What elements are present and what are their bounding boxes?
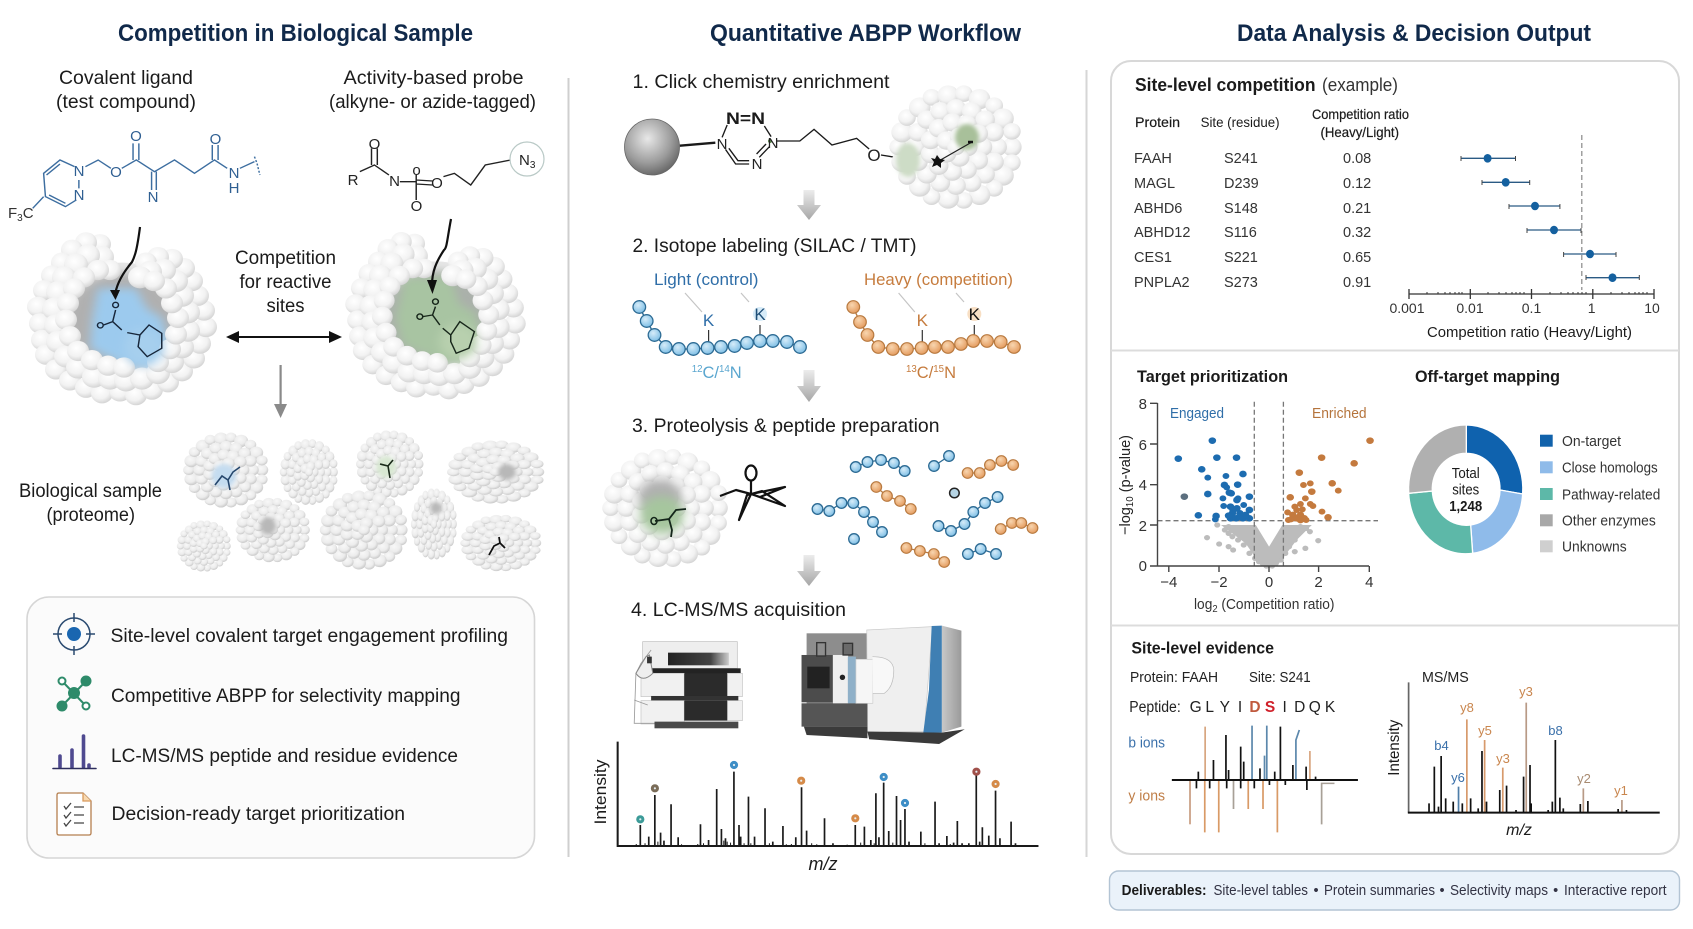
table rows: S148 bbox=[1224, 201, 1258, 217]
heading: data analysis: Data Analysis & Decision Output bbox=[1237, 20, 1591, 47]
label: heavy isotopes: 15 bbox=[933, 364, 945, 375]
table rows: MAGL bbox=[1134, 176, 1175, 192]
text: peptide sequence: Peptide: bbox=[1129, 699, 1181, 716]
step 1 heading: 1. Click chemistry enrichment bbox=[632, 71, 890, 93]
chemical structure: covalent ligand: N bbox=[148, 189, 158, 206]
text: peptide sequence: D bbox=[1294, 699, 1305, 716]
chemical structure: covalent ligand bbox=[8, 128, 260, 224]
label: activity-based probe bbox=[329, 67, 536, 113]
peptide: heavy labeled bbox=[847, 293, 1020, 355]
legend: donut: Close homologs bbox=[1562, 461, 1658, 477]
text: peptide sequence: D bbox=[1249, 699, 1261, 716]
chemical structure: activity-based probe: R bbox=[348, 172, 359, 189]
table headers: Protein bbox=[1135, 114, 1180, 130]
chart: volcano plot: 4 bbox=[1139, 477, 1147, 494]
label: heavy isotopes: 13 bbox=[906, 364, 917, 375]
label: activity-based probe: Activity-based probe bbox=[344, 67, 524, 89]
label: heavy isotopes: C/ bbox=[917, 363, 934, 382]
chemical structure: covalent ligand: O bbox=[110, 164, 122, 181]
label: y ions: y ions bbox=[1128, 788, 1165, 805]
legend: donut: Pathway-related bbox=[1562, 487, 1660, 503]
chart: MS/MS spectrum: y3 bbox=[1519, 684, 1533, 699]
instrument: LC system bbox=[634, 642, 742, 728]
table headers: Site (residue) bbox=[1201, 114, 1280, 130]
protein: digest bbox=[602, 449, 728, 567]
linker structure: N bbox=[717, 136, 727, 153]
instrument: mass spectrometer bbox=[802, 626, 965, 744]
label: covalent ligand bbox=[56, 67, 196, 113]
peptide: heavy labeled: K bbox=[917, 311, 929, 330]
chemical structure: activity-based probe: O bbox=[411, 198, 422, 215]
chart: volcano plot: 10 bbox=[1125, 496, 1136, 507]
table rows: FAAH bbox=[1134, 151, 1172, 167]
linker structure bbox=[680, 110, 901, 173]
chart: volcano plot: 0 bbox=[1139, 558, 1147, 575]
chart: forest plot: 10 bbox=[1644, 300, 1660, 316]
panel: data analysis and decision output bbox=[1110, 20, 1680, 910]
label: biological sample bbox=[19, 480, 162, 526]
chart: MS/MS spectrum: b4 bbox=[1434, 738, 1449, 753]
table rows: 0.91 bbox=[1343, 275, 1371, 291]
chart: volcano plot: (p-value) bbox=[1117, 435, 1134, 496]
table rows: ABHD6 bbox=[1134, 201, 1182, 217]
chart: LC-MS/MS spectrum: m/z bbox=[808, 854, 838, 874]
table headers: (Heavy/Light) bbox=[1320, 124, 1399, 140]
chart: forest plot: 0.001 bbox=[1389, 300, 1425, 316]
chart: volcano plot: −log bbox=[1117, 506, 1134, 535]
table rows: S116 bbox=[1224, 225, 1257, 241]
chart: donut: sites bbox=[1452, 482, 1479, 498]
section heading note: (example) bbox=[1322, 75, 1398, 95]
callout: deliverables: • bbox=[1313, 883, 1319, 899]
label: MS/MS: MS/MS bbox=[1422, 670, 1469, 686]
section: site-level competition bbox=[1134, 75, 1660, 341]
arrow: probe into pocket bbox=[432, 219, 451, 285]
chart: mirror spectrum bbox=[1172, 726, 1358, 832]
callout: deliverables: Selectivity maps bbox=[1450, 883, 1548, 899]
chemical structure: covalent ligand: H bbox=[229, 180, 239, 197]
chemical structure: covalent ligand: C bbox=[23, 205, 34, 222]
table rows: 0.12 bbox=[1343, 176, 1371, 192]
table rows: 0.21 bbox=[1343, 201, 1371, 217]
chemical structure: covalent ligand: N bbox=[74, 187, 84, 204]
text: peptide sequence: G bbox=[1190, 699, 1202, 716]
label: light isotopes: C/ bbox=[702, 363, 719, 382]
table rows: ABHD12 bbox=[1134, 225, 1190, 241]
chart: volcano plot: Enriched bbox=[1312, 405, 1367, 422]
results card outline bbox=[1111, 61, 1679, 854]
chemical structure: activity-based probe bbox=[348, 136, 544, 215]
chart: MS/MS spectrum: y8 bbox=[1460, 700, 1474, 715]
step 2 heading: 2. Isotope labeling (SILAC / TMT) bbox=[632, 235, 916, 257]
chart: volcano plot: Engaged bbox=[1170, 405, 1224, 422]
panel: quantitative ABPP workflow bbox=[591, 20, 1038, 874]
section: site-level evidence bbox=[1128, 639, 1660, 839]
chemical structure: covalent ligand: O bbox=[130, 128, 142, 145]
text: competitive ABPP: Competitive ABPP for selectivity mapping bbox=[111, 686, 460, 707]
text: peptide sequence: S bbox=[1265, 699, 1275, 716]
callout: deliverables: Protein summaries bbox=[1324, 883, 1435, 899]
section heading: off-target: Off-target mapping bbox=[1415, 368, 1560, 386]
table rows: D239 bbox=[1224, 176, 1259, 192]
label: competition for reactive sites: for reactive bbox=[240, 271, 332, 293]
table rows: 0.08 bbox=[1343, 151, 1371, 167]
arrow: step 2 to 3 bbox=[797, 370, 821, 402]
chart: volcano plot: 6 bbox=[1139, 437, 1147, 454]
section heading: Site-level competition bbox=[1135, 75, 1316, 95]
icon: target bbox=[53, 613, 95, 655]
arrow: down to proteome bbox=[274, 365, 287, 418]
protein: captured bbox=[889, 85, 1022, 209]
icon: bars bbox=[53, 736, 96, 768]
icon: checklist bbox=[57, 793, 91, 835]
table rows: PNPLA2 bbox=[1134, 275, 1190, 291]
callout: deliverables: • bbox=[1439, 883, 1445, 899]
table headers: Competition ratio bbox=[1312, 106, 1409, 122]
chart: MS/MS spectrum: b8 bbox=[1548, 723, 1563, 738]
chart: forest plot: 1 bbox=[1588, 300, 1596, 316]
chart: MS/MS spectrum: m/z bbox=[1506, 822, 1532, 839]
chart: MS/MS spectrum: y3 bbox=[1496, 751, 1510, 766]
chemical structure: covalent ligand: O bbox=[210, 131, 221, 148]
chart: LC-MS/MS spectrum: Intensity bbox=[591, 759, 610, 824]
arrow: step 1 to 2 bbox=[797, 190, 821, 220]
chart: MS/MS spectrum: y2 bbox=[1577, 771, 1591, 786]
chemical structure: covalent ligand: F bbox=[8, 205, 17, 222]
peptide: heavy labeled: K bbox=[969, 305, 981, 324]
legend: donut: Other enzymes bbox=[1562, 514, 1656, 530]
heading: competition: Competition in Biological Sample bbox=[118, 20, 473, 47]
bound molecule: ligand bbox=[97, 302, 162, 357]
label: competition for reactive sites bbox=[235, 247, 336, 317]
peptide: light labeled bbox=[633, 293, 806, 355]
callout: deliverables: • bbox=[1553, 883, 1558, 899]
label: light isotopes: 14 bbox=[719, 364, 730, 375]
chart: MS/MS spectrum: y6 bbox=[1451, 770, 1465, 785]
chart: volcano plot: (Competition ratio) bbox=[1218, 597, 1334, 613]
linker structure: N bbox=[752, 156, 762, 173]
panel: competition in biological sample bbox=[8, 20, 544, 858]
step 3 heading: 3. Proteolysis & peptide preparation bbox=[632, 415, 940, 437]
arrow: competition double-headed bbox=[226, 331, 342, 343]
callout: deliverables: Interactive report bbox=[1564, 883, 1667, 899]
table rows bbox=[1134, 151, 1371, 291]
label: biological sample: Biological sample bbox=[19, 480, 162, 502]
legend: donut: On-target bbox=[1562, 434, 1621, 450]
label: light isotopes: N bbox=[730, 363, 742, 382]
text: LC-MS/MS evidence: LC-MS/MS peptide and residue evidence bbox=[111, 746, 458, 767]
arrow: step 3 to 4 bbox=[797, 555, 821, 586]
step 4 heading: 4. LC-MS/MS acquisition bbox=[631, 599, 846, 621]
chart: LC-MS/MS spectrum bbox=[591, 742, 1038, 874]
illustration: bead with click linker and protein bbox=[624, 85, 1022, 209]
chart: forest plot: 0.1 bbox=[1522, 300, 1541, 316]
proteome: protein cloud bbox=[177, 430, 544, 571]
label: competition for reactive sites: sites bbox=[266, 295, 305, 317]
section: target prioritization bbox=[1117, 368, 1660, 615]
illustration: protein proteolysis bbox=[602, 449, 1038, 567]
table rows: S273 bbox=[1224, 275, 1258, 291]
protein: ligand bound pocket bbox=[27, 227, 217, 405]
chemical structure: activity-based probe: 3 bbox=[530, 160, 536, 171]
text: peptide sequence bbox=[1129, 699, 1336, 716]
chart: volcano plot bbox=[1117, 396, 1378, 615]
text: peptide sequence: K bbox=[1325, 699, 1336, 716]
table rows: CES1 bbox=[1134, 250, 1172, 266]
chart: volcano plot: −4 bbox=[1160, 574, 1177, 591]
text: site-level profiling: Site-level covalent target engagement profiling bbox=[110, 626, 508, 647]
chart: volcano plot: −2 bbox=[1210, 574, 1228, 591]
text: protein and site: Site: S241 bbox=[1249, 670, 1311, 686]
legend: donut bbox=[1540, 434, 1660, 556]
linker structure: N bbox=[768, 135, 778, 152]
text: peptide sequence: Q bbox=[1309, 699, 1321, 716]
icon: network bbox=[58, 676, 90, 710]
table rows: 0.65 bbox=[1343, 250, 1371, 266]
callout: deliverables: Site-level tables bbox=[1214, 883, 1308, 899]
peptide: light labeled: K bbox=[703, 311, 715, 330]
chart: MS/MS spectrum: Intensity bbox=[1386, 719, 1403, 776]
chemical structure: activity-based probe: O bbox=[369, 136, 380, 153]
table rows: S241 bbox=[1224, 151, 1258, 167]
label: heavy isotopes: N bbox=[944, 363, 956, 382]
label: b ions: b ions bbox=[1128, 735, 1165, 752]
chart: donut bbox=[1409, 425, 1523, 554]
label: biological sample: (proteome) bbox=[46, 504, 135, 526]
chart: MS/MS spectrum bbox=[1386, 682, 1660, 839]
chart: volcano plot: 0 bbox=[1265, 574, 1273, 591]
peptide fragments bbox=[812, 451, 1038, 567]
text: protein and site: Protein: FAAH bbox=[1130, 670, 1218, 686]
bound molecule: probe bbox=[417, 299, 474, 353]
callout: deliverables: Deliverables: bbox=[1122, 883, 1207, 899]
peptide: light labeled: K bbox=[754, 305, 766, 324]
arrow: ligand into pocket bbox=[115, 227, 140, 296]
section heading: Target prioritization bbox=[1137, 368, 1288, 386]
chart: volcano plot: 2 bbox=[1314, 574, 1323, 591]
table rows: S221 bbox=[1224, 250, 1258, 266]
linker structure: O bbox=[867, 146, 881, 165]
table headers bbox=[1135, 106, 1409, 140]
bead bbox=[624, 119, 680, 175]
chart: volcano plot: 2 bbox=[1139, 518, 1147, 535]
text: decision-ready: Decision-ready target prioritization bbox=[112, 804, 405, 825]
label: covalent ligand: Covalent ligand bbox=[59, 67, 193, 89]
text: peptide sequence: I bbox=[1282, 699, 1287, 716]
chemical structure: activity-based probe: N bbox=[389, 173, 400, 190]
chart: volcano plot: 2 bbox=[1212, 604, 1218, 615]
text: peptide sequence: L bbox=[1205, 699, 1214, 716]
chart: MS/MS spectrum: y5 bbox=[1478, 723, 1492, 738]
heading: workflow: Quantitative ABPP Workflow bbox=[710, 20, 1021, 47]
chemical structure: activity-based probe: O bbox=[431, 175, 443, 192]
chart: volcano plot: 8 bbox=[1139, 396, 1147, 413]
callout: deliverables bbox=[1110, 871, 1680, 910]
chemical structure: covalent ligand: N bbox=[229, 165, 239, 182]
text: protein and site bbox=[1130, 670, 1311, 686]
chart: donut: 1,248 bbox=[1449, 498, 1482, 515]
label: heavy competition: Heavy (competition) bbox=[864, 270, 1013, 289]
chart: forest plot: 0.01 bbox=[1456, 300, 1484, 316]
chart: donut: Total bbox=[1452, 465, 1480, 482]
legend: donut: Unknowns bbox=[1562, 540, 1627, 556]
label: covalent ligand: (test compound) bbox=[56, 91, 196, 113]
panel: key capabilities bbox=[27, 597, 534, 858]
chart: MS/MS spectrum: y1 bbox=[1614, 783, 1628, 798]
label: light isotopes: 12 bbox=[692, 364, 703, 375]
section heading: Site-level evidence bbox=[1131, 639, 1274, 657]
chart: forest plot bbox=[1389, 135, 1660, 341]
chemical structure: covalent ligand: N bbox=[74, 163, 84, 180]
chart: volcano plot: log bbox=[1194, 597, 1213, 613]
chart: forest plot: Competition ratio (Heavy/Light) bbox=[1427, 324, 1632, 341]
linker structure: N=N bbox=[726, 110, 765, 128]
chemical structure: activity-based probe: N bbox=[519, 152, 530, 169]
icon: scissors bbox=[720, 466, 785, 520]
label: competition for reactive sites: Competition bbox=[235, 247, 336, 269]
chart: volcano plot: 4 bbox=[1365, 574, 1373, 591]
text: peptide sequence: I bbox=[1238, 699, 1242, 716]
protein: probe bound pocket bbox=[345, 219, 526, 399]
text: peptide sequence: Y bbox=[1220, 699, 1230, 716]
table rows: 0.32 bbox=[1343, 225, 1371, 241]
chemical structure: activity-based probe: o bbox=[412, 162, 421, 179]
chemical structure: covalent ligand: 3 bbox=[17, 213, 23, 224]
label: light control: Light (control) bbox=[654, 270, 758, 289]
label: activity-based probe: (alkyne- or azide-tagged) bbox=[329, 91, 536, 113]
